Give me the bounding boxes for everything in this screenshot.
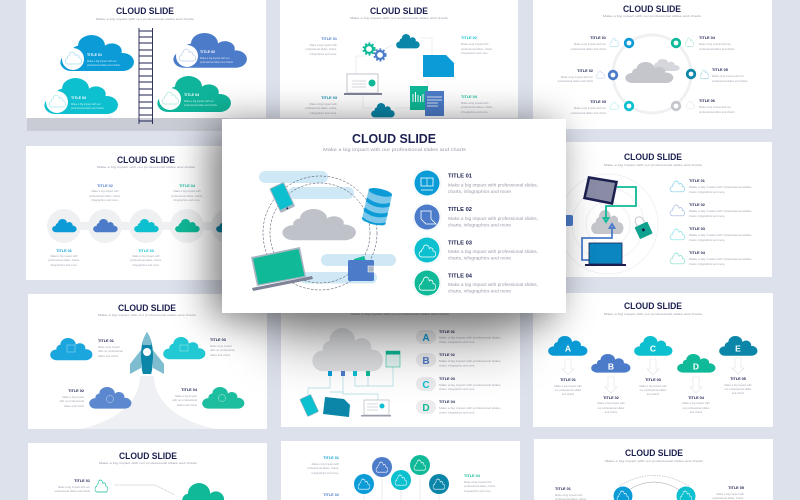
- text: title 02: Make a big impact: [62, 395, 84, 399]
- heading: rocket slide: CLOUD SLIDE: [118, 303, 176, 313]
- text: title 02: infographics and more.: [91, 198, 119, 202]
- text: title 04: professional slides and charts: [699, 47, 735, 51]
- subtitle: rocket slide: Make a big impact with our professional slides and charts: [98, 313, 197, 317]
- text: title 03: TITLE 03: [689, 227, 705, 231]
- icon: phone: [300, 394, 319, 417]
- item: B: and charts: [605, 410, 618, 414]
- subtitle: ladder slide: Make a big impact with our professional slides and charts: [96, 17, 195, 21]
- cloud: title 02: [89, 387, 131, 409]
- cloud: title 03: [44, 78, 118, 114]
- text: title 01: [98, 339, 123, 358]
- text: title 01: TITLE 01: [74, 479, 90, 483]
- balloon: title 04: [410, 455, 430, 475]
- text: title 01: Make a big impact with our: [58, 485, 90, 489]
- list item: C: charts, infographics and more.: [439, 387, 475, 391]
- list item: C: Make a big impact with professional slides,: [439, 383, 501, 387]
- text: title 02: charts, infographics and more.: [689, 214, 725, 218]
- cloud: title 03: TITLE 03: [71, 96, 86, 100]
- dashed connector: [115, 485, 175, 495]
- text: title 02: Make a big impact with our: [561, 75, 593, 79]
- text: title 03: professional slides, charts,: [305, 106, 337, 110]
- panel: connected devices slide: [530, 142, 772, 277]
- text: title 06: Make a big impact with our: [699, 105, 731, 109]
- connector nodes: [328, 371, 370, 376]
- item: A: and charts: [562, 392, 575, 396]
- text: title 05: TITLE 05: [728, 486, 744, 490]
- list item: A: charts, infographics and more.: [439, 340, 475, 344]
- balloon: title 03: [391, 470, 411, 490]
- item: E: TITLE 05: [730, 377, 746, 381]
- lower center slide shadow: [270, 290, 520, 350]
- subtitle: main: Make a big impact with our professional slides and charts: [323, 147, 467, 152]
- text: title 05: [712, 486, 744, 500]
- text: title 02: professional slides, charts,: [89, 194, 121, 198]
- item: A: [548, 336, 587, 396]
- item: D: and charts: [690, 410, 703, 414]
- text: title 01: [55, 479, 91, 493]
- text: title 04: infographics and more.: [173, 198, 201, 202]
- list item: B: charts, infographics and more.: [439, 364, 475, 368]
- text: title 01: TITLE 01: [448, 174, 473, 180]
- panel: large cloud slide: [28, 443, 267, 500]
- text: title 04: professional slides, charts,: [171, 194, 203, 198]
- icon: rocket: [130, 332, 164, 374]
- subtitle: storage slide: Make a big impact with our professional slides and charts: [351, 312, 450, 316]
- item: A: Make a big impact with: [554, 384, 582, 388]
- text: title 04: charts, infographics and more.: [689, 262, 725, 266]
- heading: process slide: CLOUD SLIDE: [370, 6, 428, 16]
- text: title 03: [689, 227, 752, 242]
- text: title 01: professional slides, charts,: [307, 466, 339, 470]
- text: title 04: [689, 251, 752, 266]
- text: title 01: [305, 37, 337, 56]
- text: title 03: TITLE 03: [590, 100, 606, 104]
- text: title 01: [307, 456, 339, 475]
- text: title 01: charts, infographics and more.: [689, 190, 725, 194]
- item: C: [634, 336, 672, 396]
- text: title 04: [172, 388, 198, 407]
- text: title 01: Make a big impact with: [312, 462, 339, 466]
- connector lines: [308, 366, 393, 400]
- text: title 01: infographics and more.: [50, 263, 78, 267]
- blue connector arrow: [582, 224, 614, 260]
- list item: A: A: [422, 333, 430, 344]
- arcs: [619, 476, 689, 491]
- text: title 02: [448, 207, 538, 227]
- text: title 04: TITLE 04: [464, 474, 481, 478]
- icon: partly hidden blue lock: [565, 215, 573, 226]
- text: title 03: Make a big impact with professional slides,: [689, 233, 752, 237]
- text: title 01: TITLE 01: [590, 36, 606, 40]
- list item: A: [416, 330, 501, 344]
- item: C: C: [650, 344, 656, 354]
- text: title 04: [699, 36, 735, 51]
- icon: cloud: [591, 210, 624, 234]
- text: title 02: Make a big impact with professional slides,: [448, 216, 538, 221]
- subtitle: large cloud slide: Make a big impact with our professional slides and charts: [99, 461, 198, 465]
- cloud: title 02: TITLE 02: [200, 50, 215, 54]
- panel: rocket slide: [28, 294, 267, 429]
- text: title 02: infographics and more.: [461, 51, 489, 55]
- text: title 04: TITLE 04: [699, 36, 716, 40]
- text: title 01: professional slides, charts,: [305, 47, 337, 51]
- text: title 03: [448, 240, 538, 260]
- text: title 02: TITLE 02: [68, 389, 84, 393]
- panel: ring slide: [533, 0, 772, 129]
- text: title 05: Make a big impact with: [717, 492, 744, 496]
- text: title 02: [689, 203, 752, 218]
- text: title 01: TITLE 01: [321, 37, 337, 41]
- item: D: our professional slides: [683, 406, 710, 410]
- text: title 02: TITLE 02: [689, 203, 705, 207]
- text: title 01: professional slides and charts: [571, 47, 607, 51]
- text: title 02: TITLE 02: [323, 493, 339, 497]
- list item: D: Make a big impact with professional slides,: [439, 406, 501, 410]
- text: title 01: professional slides, charts,: [48, 258, 80, 262]
- text: title 03: [210, 338, 235, 357]
- item: D: Make a big impact with: [682, 401, 710, 405]
- circle: title 01: [614, 486, 632, 500]
- cloud: title 01: Make a big impact with our: [87, 60, 117, 63]
- heading: large cloud slide: CLOUD SLIDE: [119, 451, 177, 461]
- list item: D: [416, 400, 501, 414]
- heading: ring slide: CLOUD SLIDE: [623, 4, 681, 14]
- cloud: title 03: professional slides and charts: [71, 107, 105, 110]
- item: D: D: [693, 362, 699, 372]
- icon: laptop: [585, 243, 626, 266]
- subtitle: devices slide: Make a big impact with our professional slides and charts: [604, 163, 703, 167]
- panel: ladder clouds slide: [26, 0, 266, 131]
- text: title 03: slides and charts: [210, 353, 231, 357]
- icon: blue document: [423, 55, 454, 77]
- cloud: title 01: [50, 338, 92, 360]
- item: E: our professional slides: [725, 387, 752, 391]
- subtitle: lettered slide: Make a big impact with our professional slides and charts: [604, 312, 703, 316]
- text: title 01: infographics and more.: [310, 52, 337, 56]
- icon: laptop: [344, 74, 382, 95]
- icon: large cloud: [173, 483, 234, 500]
- text: title 04: [171, 184, 203, 202]
- text: title 02: TITLE 02: [577, 69, 593, 73]
- item: D: [677, 354, 715, 414]
- text: title 04: Make a big impact with: [464, 480, 492, 484]
- text: title 02: Make a big impact with: [91, 189, 119, 193]
- item: E: and charts: [732, 391, 745, 395]
- item: E: Make a big impact with: [724, 383, 752, 387]
- text: title 02: TITLE 02: [448, 207, 472, 213]
- item: C: TITLE 03: [645, 378, 661, 382]
- list item: D: charts, infographics and more.: [439, 410, 475, 414]
- text: title 02: TITLE 02: [461, 36, 477, 40]
- item: C: and charts: [647, 392, 660, 396]
- panel: lettered clouds slide: [533, 293, 773, 427]
- concentric circles: [558, 174, 658, 274]
- icon: text document: [425, 91, 444, 116]
- list item: C: TITLE 03: [439, 377, 455, 381]
- icons: list: [670, 181, 685, 264]
- text: title 02: [59, 389, 85, 408]
- text: title 01: infographics and more.: [312, 471, 339, 475]
- text: title 04: infographics and more.: [461, 110, 489, 114]
- text: title 01: Make a big impact with professional slides,: [448, 182, 538, 188]
- icon: outline cloud: [95, 480, 108, 492]
- circle: title 05: [676, 486, 696, 500]
- text: title 04: professional slides, charts,: [461, 105, 493, 109]
- list icon: title 02: [413, 203, 441, 231]
- green connector arrow: [604, 187, 636, 222]
- heading: arcs slide: CLOUD SLIDE: [625, 448, 683, 458]
- stems: [364, 475, 439, 500]
- text: title 01: Make a big impact with professional slides,: [689, 185, 752, 189]
- text: title 02: Make a big impact with professional slides,: [689, 209, 752, 213]
- subtitle: arcs slide: Make a big impact with our professional slides and charts: [605, 459, 704, 463]
- icon: database: [361, 186, 393, 227]
- item: C: our professional slides: [640, 388, 667, 392]
- center slide shadow: [212, 124, 556, 318]
- text: title 03: Make a big impact: [210, 344, 232, 348]
- text: title 03: Make a big impact with our: [574, 106, 606, 110]
- icon: phone: [269, 182, 295, 213]
- panel: balloons slide: [281, 441, 520, 500]
- text: title 02: professional slides and charts: [558, 79, 594, 83]
- list item: B: TITLE 02: [439, 353, 455, 357]
- heading: lettered slide: CLOUD SLIDE: [624, 301, 682, 311]
- text: title 02: TITLE 02: [97, 184, 113, 188]
- item: A: A: [565, 344, 571, 354]
- text: title 03: infographics and more.: [310, 111, 337, 115]
- cloud: title 01: TITLE 01: [87, 53, 102, 57]
- text: title 04: infographics and more.: [464, 489, 492, 493]
- text: title 02: professional slides, charts,: [461, 47, 493, 51]
- item: C: Make a big impact with: [639, 384, 667, 388]
- icon: gears: [364, 44, 386, 60]
- text: title 04: Make a big impact with: [173, 189, 201, 193]
- panel: cloud chain slide: [26, 146, 266, 280]
- icon: lock: [631, 214, 653, 239]
- text: title 04: [464, 474, 496, 493]
- text: title 01: slides and charts: [98, 354, 119, 358]
- item: A: our professional slides: [555, 388, 582, 392]
- cloud: title 04: TITLE 04: [184, 93, 199, 97]
- icon: large cloud: [312, 328, 383, 371]
- cloud: title 01: professional slides and charts: [87, 64, 121, 67]
- text: title 01: with our professional: [98, 349, 123, 353]
- text: title 01: [689, 179, 752, 194]
- list icon: title 01: [413, 169, 441, 197]
- text: title 03: [305, 96, 337, 115]
- text: title 03: TITLE 03: [210, 338, 226, 342]
- text: title 03: Make a big impact with professional slides,: [448, 249, 538, 254]
- text: title 03: TITLE 03: [448, 240, 473, 246]
- text: title 02: Make a big impact with: [461, 42, 489, 46]
- text: title 01: Make a big impact: [98, 345, 120, 349]
- text: title 06: TITLE 06: [699, 99, 715, 103]
- text: title 04: professional slides, charts,: [464, 484, 496, 488]
- cloud: title 01: [60, 35, 134, 71]
- text: title 03: TITLE 03: [138, 249, 154, 253]
- list item: B: Make a big impact with professional slides,: [439, 359, 501, 363]
- item: B: TITLE 02: [603, 396, 619, 400]
- list icon: title 03: [413, 236, 441, 264]
- list item: B: B: [422, 356, 430, 367]
- connector lines: [356, 38, 432, 108]
- subtitle: chain slide: Make a big impact with our professional slides and charts: [97, 165, 196, 169]
- text: title 03: with our professional: [210, 348, 235, 352]
- list item: B: [416, 353, 501, 368]
- cloud: title 02: Make a big impact with our: [200, 57, 230, 60]
- balloon: title 02: [372, 457, 392, 477]
- text: title 04: TITLE 04: [181, 388, 198, 392]
- panel: process flow slide: [280, 0, 518, 118]
- text: title 02: with our professional: [59, 399, 84, 403]
- list item: A: TITLE 01: [439, 330, 455, 334]
- panel: main center slide: [222, 119, 566, 313]
- item: E: [719, 336, 757, 395]
- icon: bar chart document: [410, 86, 428, 110]
- icons: ring items: [596, 38, 709, 109]
- panel: arcs slide: [534, 439, 773, 500]
- list item: D: TITLE 04: [439, 400, 456, 404]
- text: title 03: Make a big impact with: [310, 102, 337, 106]
- text: title 03: [571, 100, 607, 115]
- text: title 05: professional slides and charts: [712, 79, 748, 83]
- tablet screen: [586, 179, 615, 202]
- icon: bottom cloud: [371, 103, 395, 117]
- balloon: title 05: [429, 474, 449, 494]
- heading: ladder slide: CLOUD SLIDE: [116, 6, 174, 16]
- text: title 01: TITLE 01: [689, 179, 705, 183]
- text: title 04: with our professional: [172, 398, 197, 402]
- text: title 06: professional slides and charts: [699, 110, 735, 114]
- text: title 02: slides and charts: [64, 404, 85, 408]
- text: title 04: slides and charts: [177, 403, 198, 407]
- item: E: E: [735, 344, 741, 354]
- light blue background bars: [259, 171, 396, 284]
- text: title 03: infographics and more.: [132, 263, 160, 267]
- text: title 04: Make a big impact with: [461, 101, 489, 105]
- text: title 04: Make a big impact: [175, 394, 197, 398]
- text: title 01: [555, 487, 587, 500]
- icon: map document: [323, 397, 350, 417]
- item: B: [591, 354, 630, 414]
- text: title 03: charts, infographics and more.: [689, 238, 725, 242]
- item: B: B: [608, 362, 614, 372]
- text: title 01: [448, 174, 538, 194]
- text: title 01: Make a big impact with: [310, 43, 337, 47]
- text: title 03: TITLE 03: [321, 96, 337, 100]
- ring diagram: [609, 35, 695, 113]
- icon: central cloud: [282, 209, 356, 240]
- text: title 01: [48, 249, 80, 267]
- text: title 04: TITLE 04: [448, 274, 473, 280]
- text: title 01: TITLE 01: [555, 487, 571, 491]
- text: title 02: [558, 69, 594, 83]
- cloud: title 03: Make a big impact with our: [71, 103, 101, 106]
- balloon: title 01: [354, 474, 374, 494]
- text: title 04: TITLE 04: [179, 184, 196, 188]
- heading: main title: CLOUD SLIDE: [352, 131, 436, 146]
- text: title 06: [699, 99, 735, 114]
- text: title 01: TITLE 01: [56, 249, 72, 253]
- cloud: title 02: [173, 33, 247, 68]
- text: title 01: Make a big impact with our: [574, 42, 606, 46]
- text: title 01: TITLE 01: [323, 456, 339, 460]
- text: title 03: Make a big impact with: [132, 254, 160, 258]
- text: title 04: Make a big impact with our: [699, 42, 731, 46]
- text: title 02: [461, 36, 493, 55]
- icon: laptop: [251, 247, 313, 291]
- text: title 05: Make a big impact with our: [712, 74, 744, 78]
- text: title 01: Make a big impact with: [555, 493, 583, 497]
- subtitle: process slide: Make a big impact with our professional slides and charts: [350, 16, 449, 20]
- subtitle: ring slide: Make a big impact with our professional slides and charts: [603, 14, 702, 18]
- text: title 04: [448, 274, 538, 294]
- list icon: title 04: [413, 269, 441, 297]
- text: title 04: TITLE 04: [461, 95, 478, 99]
- item: B: Make a big impact with: [597, 401, 625, 405]
- item: A: TITLE 01: [560, 378, 576, 382]
- cloud: title 04: professional slides and charts: [184, 104, 218, 107]
- text: title 01: Make a big impact with: [50, 254, 78, 258]
- heading: chain slide: CLOUD SLIDE: [117, 155, 175, 165]
- item: B: our professional slides: [598, 406, 625, 410]
- text: title 04: Make a big impact with professional slides,: [689, 257, 752, 261]
- icon: wallet: [348, 256, 374, 281]
- text: title 02: charts, infographics and more: [448, 222, 512, 227]
- text: title 04: charts, infographics and more: [448, 288, 512, 294]
- icon: tablet: [583, 176, 618, 205]
- text: title 05: TITLE 05: [712, 68, 728, 72]
- cloud: title 04: Make a big impact with our: [184, 100, 214, 103]
- rocket exhaust: [80, 376, 215, 429]
- cloud: title 04: [202, 387, 244, 409]
- icon: laptop: [361, 400, 391, 416]
- text: title 05: professional slides, charts,: [712, 496, 744, 500]
- cloud chain: [47, 209, 245, 243]
- heading: devices slide: CLOUD SLIDE: [624, 152, 682, 162]
- icon: ladder: [139, 28, 152, 124]
- dashed orbit rings: [263, 176, 377, 290]
- text: title 03: professional slides, charts,: [130, 258, 162, 262]
- cloud: title 02: professional slides and charts: [200, 61, 234, 64]
- text: title 02: [89, 184, 121, 202]
- list item: C: C: [422, 380, 430, 391]
- list item: D: D: [422, 403, 430, 414]
- icon: calendar: [386, 351, 400, 367]
- text: title 01: professional slides and charts: [55, 489, 91, 493]
- text: title 04: Make a big impact with professional slides,: [448, 282, 538, 287]
- text: title 01: [571, 36, 607, 51]
- text: title 05: [712, 68, 748, 83]
- text: title 01: TITLE 01: [98, 339, 114, 343]
- cloud: title 03: [163, 337, 205, 359]
- text: title 04: [461, 95, 493, 114]
- text: title 03: professional slides and charts: [571, 111, 607, 115]
- text: title 03: charts, infographics and more: [448, 256, 512, 260]
- text: title 03: [130, 249, 162, 267]
- text: title 01: charts, infographics and more: [448, 189, 512, 194]
- cloud: title 04: [157, 76, 231, 112]
- panel: storage diagram slide: [281, 300, 520, 427]
- text: title 04: TITLE 04: [689, 251, 706, 255]
- list item: C: [416, 377, 501, 391]
- icon: top cloud: [396, 34, 420, 48]
- item: D: TITLE 04: [688, 396, 705, 400]
- list item: A: Make a big impact with professional slides,: [439, 336, 501, 340]
